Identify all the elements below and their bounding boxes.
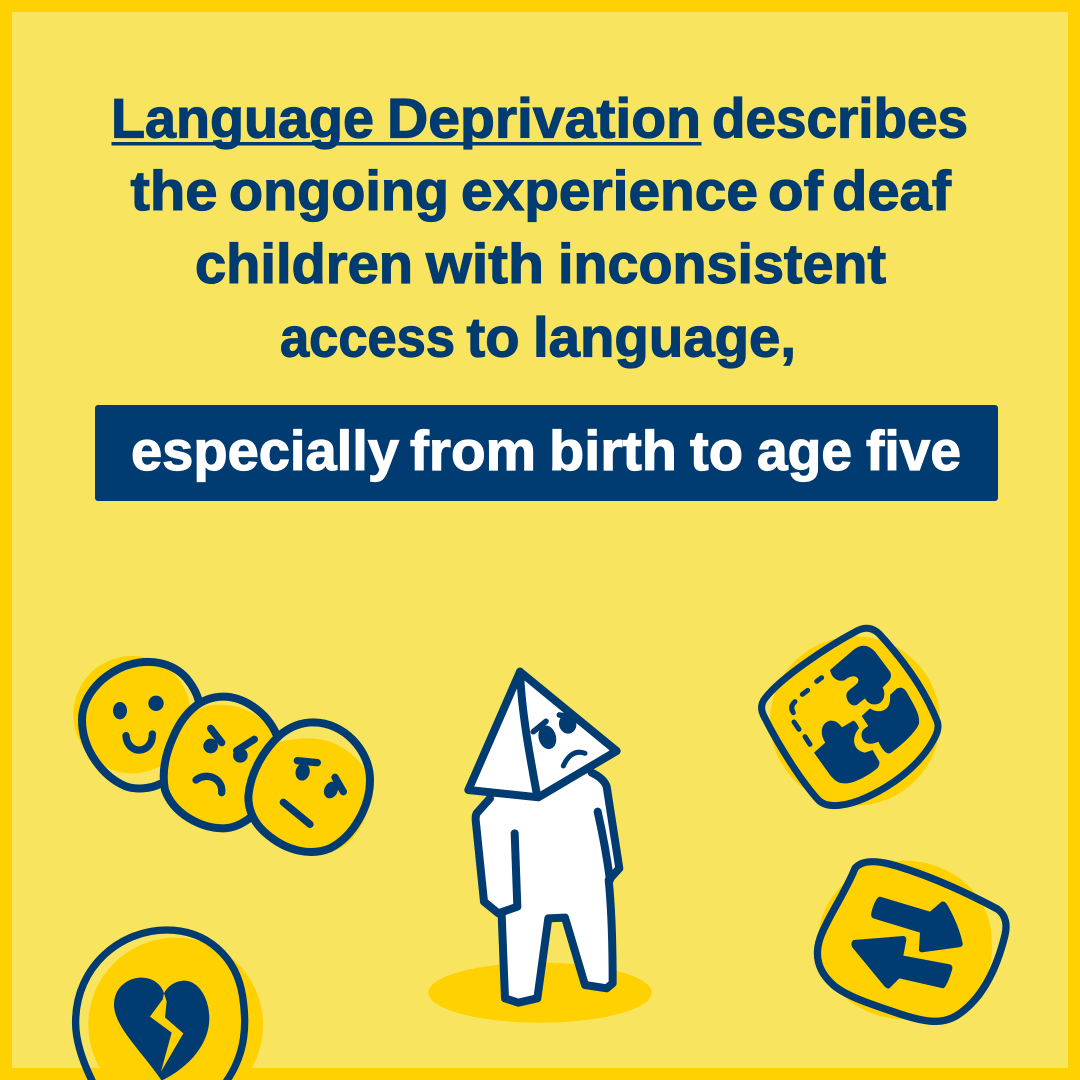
heading line 4: to [466,306,520,368]
heading line 2: of [768,159,823,222]
banner: especially from birth to age five [95,405,998,501]
banner: especially from birth to age five: to [690,419,743,482]
banner: especially from birth to age five: especially [131,419,399,482]
icon: swap arrows [817,861,1006,1021]
heading line 2 [130,159,951,222]
heading line 4 [280,306,796,368]
heading line 1 with underlined term [111,86,968,150]
heading line 2: experience [461,159,758,222]
heading line 4: language, [533,306,796,368]
heading line 2: deaf [832,159,951,222]
icon: three emotion faces [73,656,371,853]
banner: especially from birth to age five: age [757,419,852,482]
heading line 1 with underlined term: Language [111,86,374,150]
heading line 3: inconsistent [558,232,886,295]
heading line 2: ongoing [229,159,449,222]
icon: puzzle with missing piece [762,628,940,806]
banner: especially from birth to age five: birth [549,419,677,482]
heading line 3: with [425,232,544,295]
heading line 2: the [130,159,218,222]
heading line 1 with underlined term: describes [712,86,968,150]
icon: broken heart [76,930,263,1080]
heading line 3 [195,232,886,295]
heading line 1 with underlined term: Deprivation [387,86,701,150]
heading [111,86,968,368]
heading line 4: access [280,306,455,368]
heading line 3: children [195,232,413,295]
figure: sad character with pyramid head [428,672,652,1023]
banner: especially from birth to age five: five [866,419,961,482]
banner: especially from birth to age five: from [410,419,536,482]
